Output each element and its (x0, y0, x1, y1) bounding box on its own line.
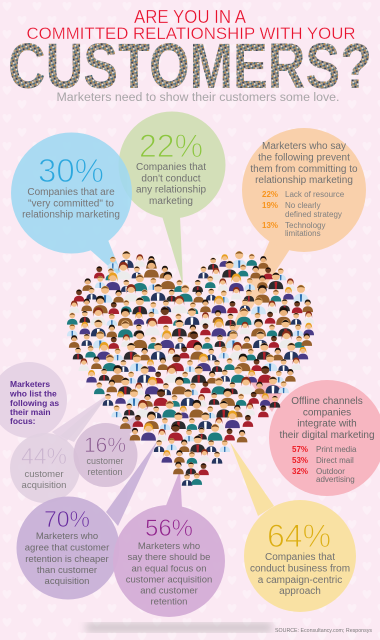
panel: main focus intro: focus: (10, 416, 36, 426)
panel: 64% campaign-centric: conduct business from (250, 564, 350, 574)
panel: 56% equal focus: customer acquisition (126, 574, 212, 586)
panel: 30% very committed (11, 132, 132, 280)
panel: 22% no relationship marketing: any relationship (136, 184, 206, 196)
panel: 22% no relationship marketing: Companies that (136, 162, 206, 173)
panel: 44% customer acquisition: acquisition (22, 480, 66, 491)
panel: 56% equal focus: retention (151, 596, 187, 608)
shadow under heart (86, 623, 272, 632)
panel: 56% equal focus: 56% (145, 515, 193, 542)
channel list: 53% (292, 456, 308, 465)
panel: offline channels: Offline channels (291, 396, 363, 407)
channel list: Print media (316, 445, 357, 454)
panel: main focus intro: who list the (9, 388, 57, 398)
panel: 44% customer acquisition (10, 395, 108, 503)
barrier list: Technology (285, 221, 325, 230)
panel: 64% campaign-centric: a campaign-centric (258, 575, 342, 586)
panel: 64% campaign-centric: Companies that (265, 552, 335, 563)
panel: main focus intro: following as (10, 398, 59, 408)
channel list: Outdoor (316, 467, 345, 476)
panel: 22% no relationship marketing: don't conduct (141, 174, 201, 184)
panel: 70% retention is cheaper: Marketers who (36, 531, 98, 542)
channel list (292, 445, 357, 484)
panel: 56% equal focus: Marketers who (138, 541, 200, 552)
channel list: 57% (292, 445, 308, 454)
panel: 56% equal focus: and customer (140, 586, 198, 596)
title: COMMITTED RELATIONSHIP WITH YOUR (26, 24, 356, 43)
panel: offline channels: integrate with (297, 418, 357, 430)
panel: 30% very committed: relationship marketing (22, 210, 120, 220)
panel: offline channels: their digital marketing (279, 430, 375, 441)
panel: 22% no relationship marketing: marketing (149, 196, 193, 207)
barrier list: 19% (262, 201, 278, 210)
panel: barriers to relationship marketing: the following prevent (258, 152, 350, 164)
panel: 70% retention is cheaper: acquisition (45, 576, 89, 587)
channel list: Direct mail (316, 456, 354, 465)
channel list: advertising (316, 475, 355, 484)
panel: offline channels (245, 375, 380, 496)
panel: 44% customer acquisition: customer (24, 469, 64, 480)
heart of people (67, 251, 314, 486)
panel: 70% retention is cheaper: 70% (44, 506, 90, 532)
panel: barriers to relationship marketing: them from committing to (250, 164, 358, 175)
panel: 70% retention is cheaper: retention is cheaper (25, 554, 109, 565)
panel: 16% customer retention: retention (87, 467, 123, 477)
panel: barriers to relationship marketing (218, 128, 366, 360)
panel: 16% customer retention (74, 405, 150, 487)
panel: 22% no relationship marketing: 22% (139, 128, 203, 164)
barrier list: No clearly (285, 201, 321, 210)
panel: 30% very committed: Companies that are (27, 187, 115, 198)
panel: 30% very committed: 30% (38, 152, 104, 189)
panel: main focus intro: Marketers (10, 379, 50, 389)
panel: 64% campaign-centric (230, 442, 356, 612)
panel: 16% customer retention: 16% (84, 434, 126, 457)
barrier list: 13% (262, 221, 278, 230)
panel: 44% customer acquisition: 44% (21, 443, 67, 469)
panel: 56% equal focus: say there should be (128, 552, 210, 563)
panel: 64% campaign-centric: 64% (267, 518, 331, 554)
panel: 16% customer retention: customer (86, 456, 124, 466)
panel: offline channels: companies (303, 408, 351, 418)
barrier list: 22% (262, 190, 278, 199)
panel: 56% equal focus: an equal focus on (131, 564, 207, 574)
channel list: 32% (292, 467, 308, 476)
barrier list: defined strategy (285, 210, 342, 219)
panel: 64% campaign-centric: approach (279, 586, 321, 597)
panel: barriers to relationship marketing: Marketers who say (262, 141, 346, 152)
panel: 56% equal focus (113, 470, 225, 617)
barrier list: limitations (285, 229, 321, 238)
title: ARE YOU IN A (134, 7, 246, 27)
barrier list (262, 190, 345, 238)
panel: main focus intro (0, 362, 112, 442)
panel: 70% retention is cheaper: than customer (37, 565, 97, 576)
panel: 22% no relationship marketing (118, 112, 226, 285)
panel: main focus intro: their main (10, 407, 51, 417)
panel: barriers to relationship marketing: relationship marketing (255, 175, 353, 186)
barrier list: Lack of resource (285, 190, 345, 199)
subtitle: Marketers need to show their customers some love. (56, 92, 340, 104)
source: SOURCE: Econsultancy.com; Responsys (275, 628, 372, 634)
panel: 70% retention is cheaper (16, 440, 158, 600)
panel: 70% retention is cheaper: agree that customer (25, 542, 109, 554)
panel: 30% very committed: "very committed" to (28, 198, 114, 210)
